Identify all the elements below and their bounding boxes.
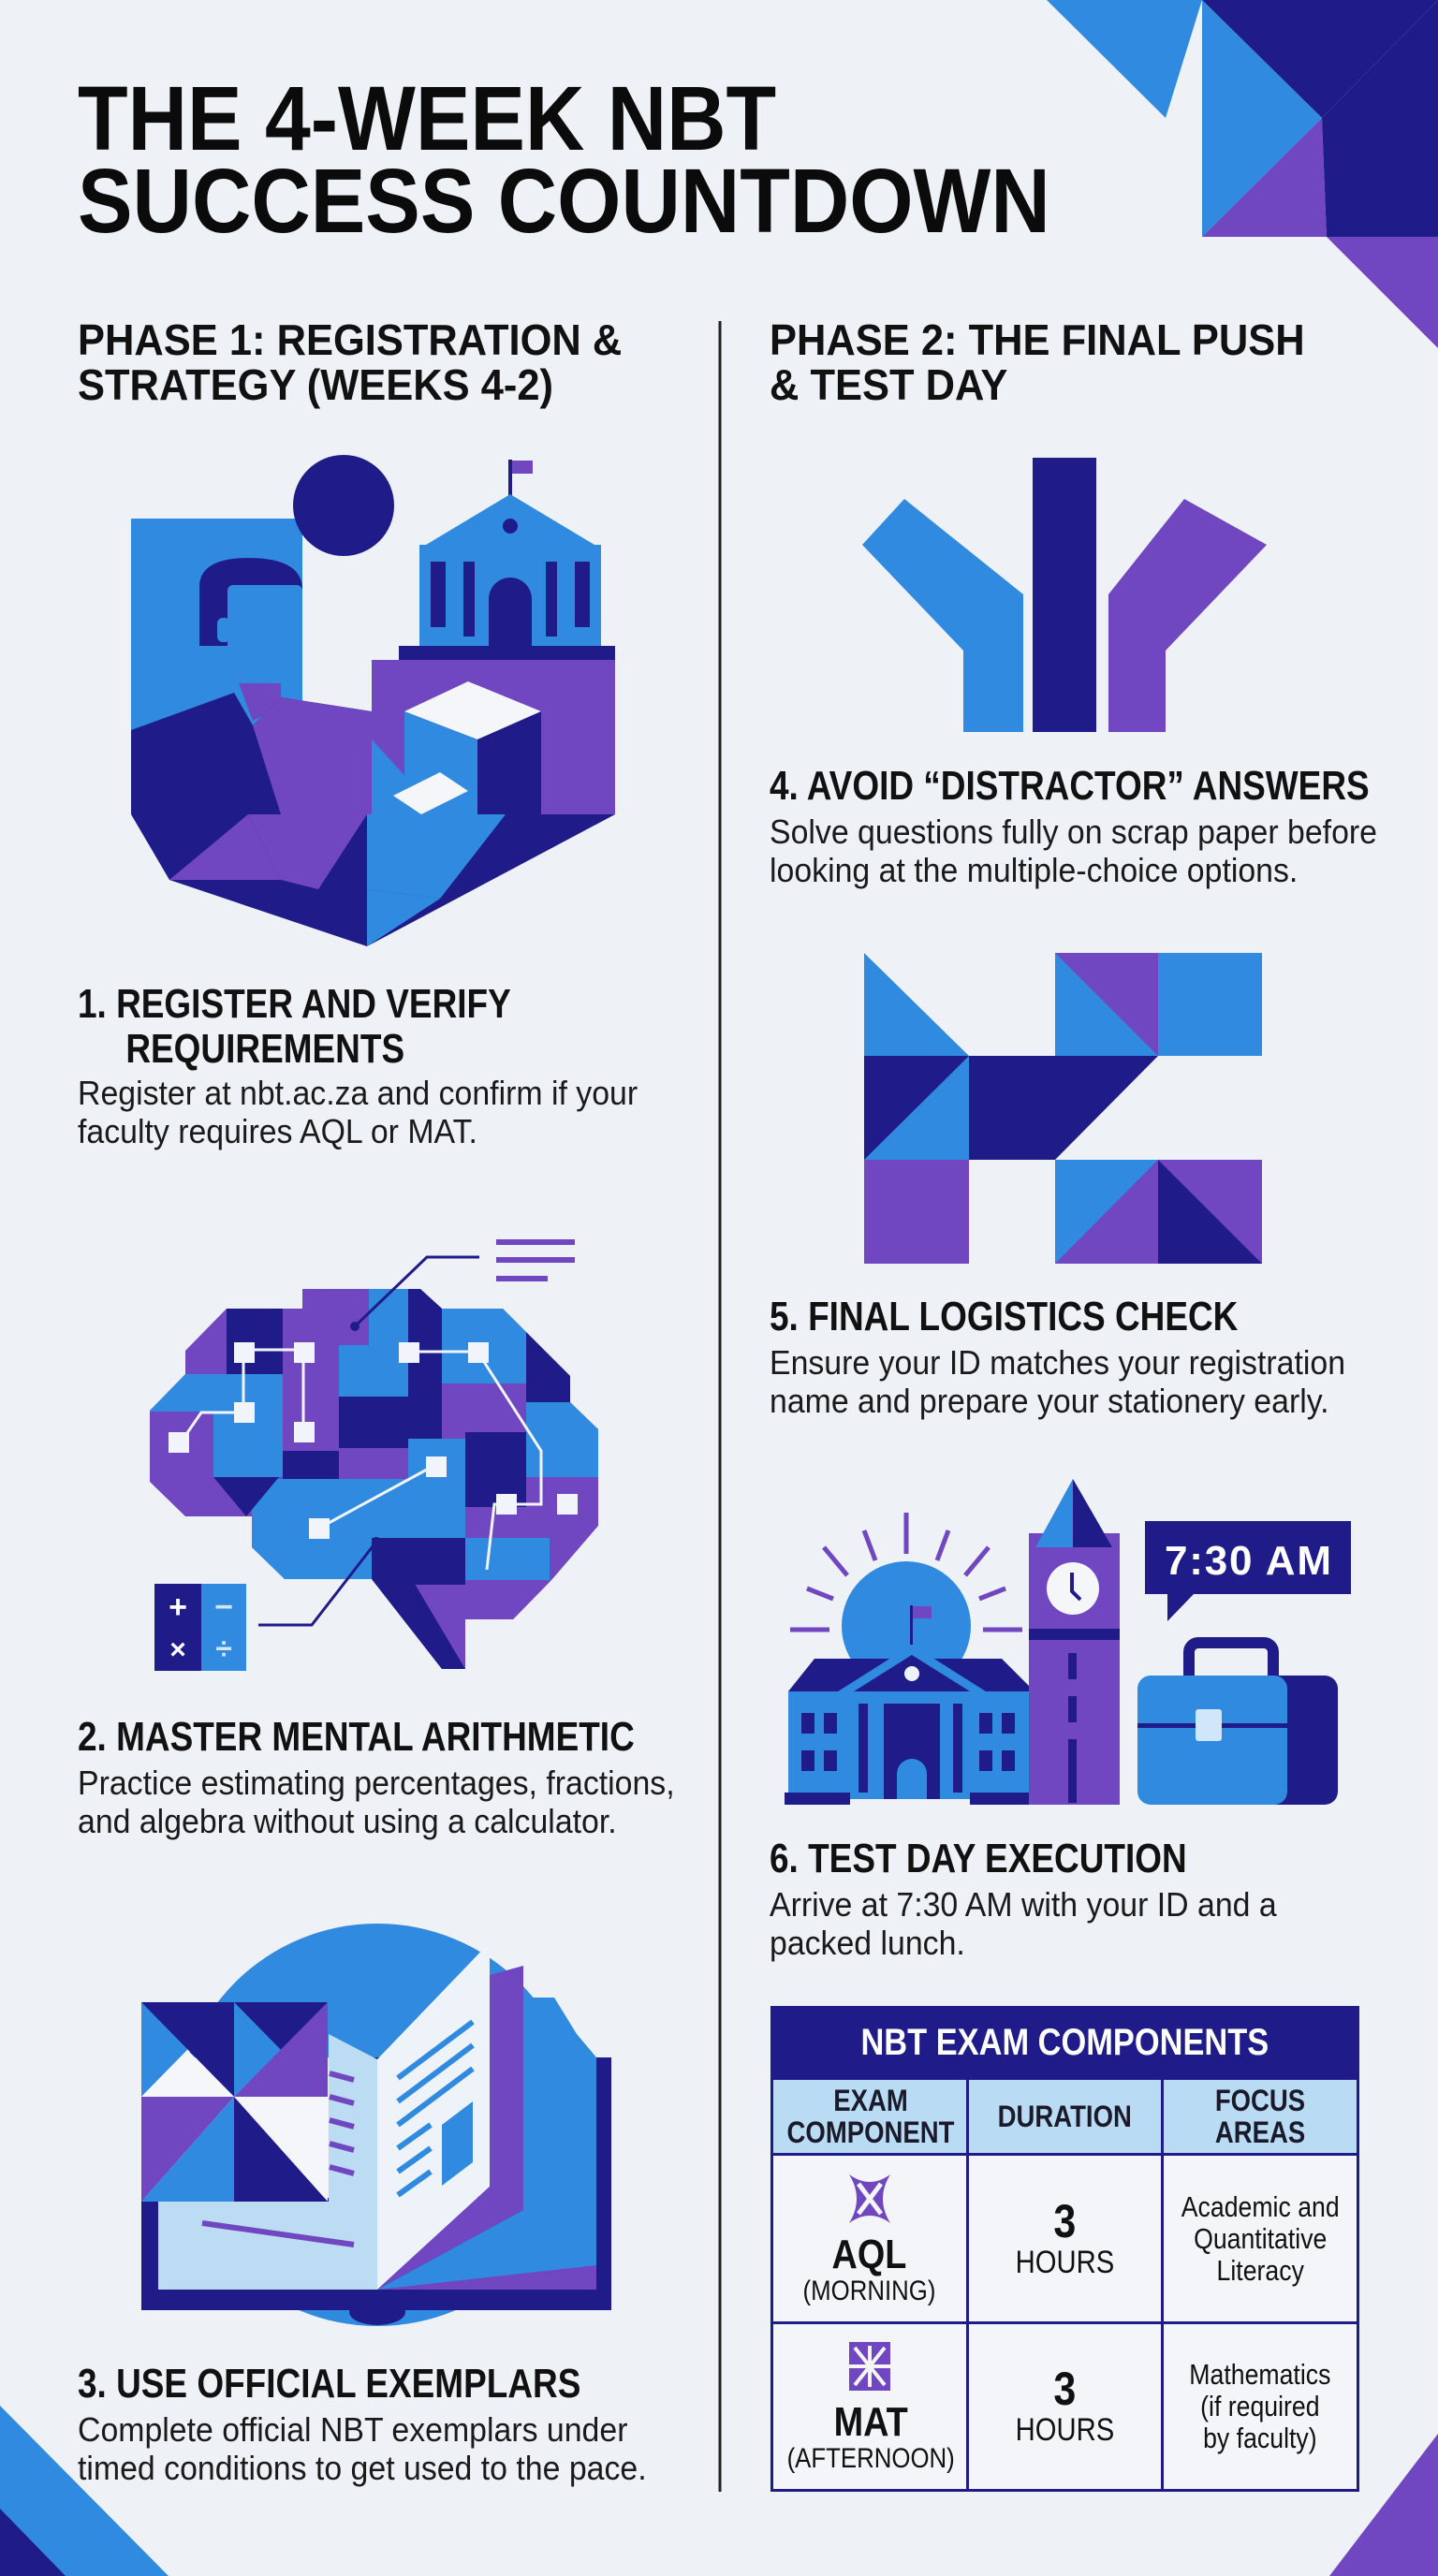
step 1 heading: REQUIREMENTS (125, 1026, 404, 1072)
heading: phase 1: STRATEGY (WEEKS 4-2) (78, 360, 553, 409)
step 4 text: Solve questions fully on scrap paper before (770, 812, 1377, 851)
step 3 heading: 3. USE OFFICIAL EXEMPLARS (78, 2361, 580, 2407)
step 2 text: and algebra without using a calculator. (78, 1802, 617, 1840)
step 6 (770, 1836, 1277, 1962)
step 4 heading: 4. AVOID “DISTRACTOR” ANSWERS (770, 763, 1370, 809)
table: NBT exam components: 3 (1054, 2363, 1076, 2415)
table: NBT exam components: NBT EXAM COMPONENTS (861, 2022, 1269, 2063)
table: NBT exam components: COMPONENT (787, 2115, 954, 2149)
step 6 text: Arrive at 7:30 AM with your ID and a (770, 1885, 1277, 1924)
step 4 text (770, 812, 1377, 889)
table: NBT exam components: AREAS (1215, 2115, 1305, 2149)
step 1 text: Register at nbt.ac.za and confirm if your (78, 1074, 638, 1112)
step 2 heading: 2. MASTER MENTAL ARITHMETIC (78, 1714, 635, 1760)
table: NBT exam components: HOURS (1016, 2245, 1114, 2280)
table: NBT exam components: HOURS (1016, 2412, 1114, 2448)
table: NBT exam components: Mathematics (1190, 2358, 1331, 2391)
step 1 (78, 981, 638, 1150)
illustration: open book (141, 1924, 611, 2326)
illustration: brain: × (169, 1634, 186, 1665)
illustration: brain: + (169, 1589, 187, 1625)
table: NBT exam components: (if required (1200, 2390, 1320, 2422)
icon: logistics tiles (864, 953, 1262, 1264)
step 5 heading: 5. FINAL LOGISTICS CHECK (770, 1294, 1238, 1339)
step 5 text: Ensure your ID matches your registration (770, 1343, 1345, 1382)
table: NBT exam components: 3 (1054, 2194, 1076, 2247)
title: THE 4-WEEK NBT (78, 67, 776, 169)
decoration: bottom left triangle (0, 2406, 169, 2576)
table: NBT exam components: Literacy (1216, 2254, 1304, 2286)
step 4 text: looking at the multiple-choice options. (770, 851, 1298, 889)
step 1 text (78, 1074, 638, 1150)
step 1 text: faculty requires AQL or MAT. (78, 1112, 477, 1150)
decoration: bottom right triangle (1329, 2434, 1438, 2576)
heading: phase 2 (770, 315, 1305, 409)
table: NBT exam components: (MORNING) (803, 2275, 936, 2306)
heading: phase 1 (78, 315, 622, 409)
step 3 (78, 2361, 647, 2487)
step 4 (770, 763, 1377, 889)
title: SUCCESS COUNTDOWN (78, 150, 1050, 252)
table: NBT exam components: Quantitative (1194, 2222, 1327, 2254)
illustration: brain (140, 1239, 609, 1676)
icon: Y shape distractor (862, 458, 1267, 732)
step 3 text: Complete official NBT exemplars under (78, 2410, 627, 2449)
table: NBT exam components: AQL (832, 2232, 907, 2276)
divider (719, 321, 721, 2492)
table: NBT exam components: FOCUS (1215, 2084, 1305, 2117)
decoration: top right triangles (1047, 0, 1438, 348)
illustration: test day campus, clock tower, time bubble, briefcase: 7:30 AM (1165, 1538, 1331, 1584)
illustration: registration person and campus (131, 455, 615, 946)
step 2 text (78, 1764, 675, 1840)
step 6 heading: 6. TEST DAY EXECUTION (770, 1836, 1187, 1881)
table: NBT exam components: by faculty) (1203, 2422, 1317, 2454)
heading: phase 1: PHASE 1: REGISTRATION & (78, 315, 622, 364)
step 3 text (78, 2410, 647, 2487)
step 6 text: packed lunch. (770, 1924, 965, 1962)
table: NBT exam components: (AFTERNOON) (787, 2443, 955, 2474)
step 5 text (770, 1343, 1345, 1420)
step 2 (78, 1714, 675, 1840)
step 1 heading: 1. REGISTER AND VERIFY (78, 981, 511, 1027)
table: NBT exam components (770, 2006, 1359, 2492)
step 2 text: Practice estimating percentages, fractions, (78, 1764, 675, 1802)
table: NBT exam components: EXAM (833, 2084, 908, 2117)
table: NBT exam components: DURATION (998, 2100, 1132, 2133)
table: NBT exam components: Academic and (1181, 2190, 1340, 2222)
heading: phase 2: & TEST DAY (770, 360, 1007, 409)
title (78, 67, 1050, 252)
illustration: test day campus, clock tower, time bubble, briefcase (785, 1479, 1351, 1805)
table: NBT exam components: MAT (834, 2399, 908, 2445)
step 5 (770, 1294, 1345, 1420)
heading: phase 2: PHASE 2: THE FINAL PUSH (770, 315, 1305, 364)
step 5 text: name and prepare your stationery early. (770, 1382, 1329, 1420)
step 3 text: timed conditions to get used to the pace. (78, 2449, 647, 2487)
illustration: brain: ÷ (215, 1632, 232, 1665)
illustration: brain: − (214, 1589, 233, 1625)
step 6 text (770, 1885, 1277, 1962)
step 1 heading (78, 981, 511, 1072)
